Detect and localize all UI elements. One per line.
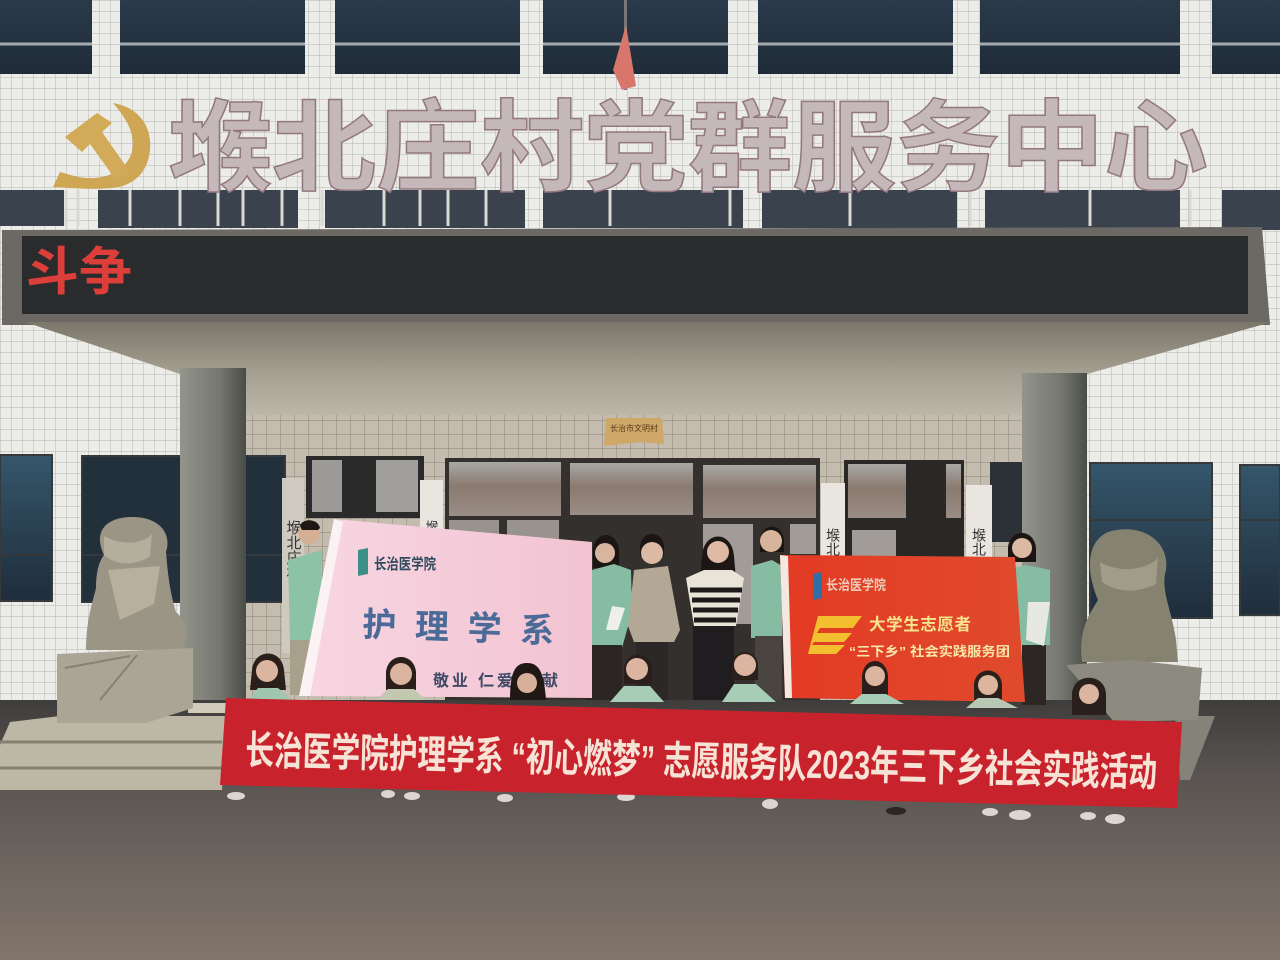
building facade [0, 0, 1280, 420]
seated person 6 [850, 661, 904, 704]
vertical name boards: 堠北 [825, 528, 841, 557]
plaque above door [604, 418, 664, 446]
ground-floor wall [0, 375, 1280, 710]
banner logo: 长治医学院 [826, 577, 886, 593]
seated people row [248, 652, 1106, 715]
icon: hammer and sickle emblem [53, 103, 150, 189]
icon: yellow E mark [808, 616, 862, 654]
vertical name boards: 堠北 [971, 528, 987, 557]
side windows [0, 455, 1280, 618]
vertical name boards: 堠北庄村 [284, 520, 302, 580]
person: teacher in stripes [686, 536, 744, 700]
heading: building sign: 堠北庄村党群服务中心 [168, 93, 1208, 205]
seated person 1 [248, 654, 292, 700]
upper windows [0, 0, 1280, 74]
shoes below main banner [227, 790, 1125, 824]
seated person 8 [1072, 678, 1106, 715]
plaque above door: 长治市文明村 [610, 423, 658, 433]
red-orange banner: “三下乡” 社会实践服务团 [849, 644, 1010, 659]
stone lion left [57, 517, 193, 723]
person: girl right of teacher [751, 526, 784, 700]
person: teacher in grey [628, 534, 680, 700]
vertical name boards: 堠 [424, 520, 438, 533]
stone lion right [1066, 529, 1202, 722]
red-orange banner [780, 555, 1025, 702]
banner logo: 长治医学院 [374, 555, 436, 573]
entrance windows and doors [306, 456, 1022, 700]
pillars [180, 368, 1087, 703]
person: far right girl [1008, 533, 1050, 705]
standing people back row [288, 520, 1050, 705]
LED sign canopy [2, 227, 1270, 325]
seated person 4 [610, 654, 664, 702]
seated person 2 [376, 657, 426, 700]
person: left man [288, 520, 322, 695]
mid windows behind sign [0, 190, 1280, 230]
pink banner: 护理学系 [362, 606, 555, 651]
main red banner [220, 698, 1182, 808]
pink banner: 敬业 仁爱 奉献 [433, 671, 558, 690]
ground [0, 700, 1280, 960]
vertical name boards [282, 478, 1040, 653]
flag on pole [613, 0, 636, 90]
banner logo [813, 572, 886, 600]
step right [1175, 716, 1215, 780]
person: girl in green [586, 535, 632, 700]
seated person 5 [722, 652, 776, 702]
LED text: 斗争 [26, 244, 132, 302]
seated person 3 [510, 663, 546, 700]
pink banner [299, 519, 592, 698]
seated person 7 [966, 670, 1018, 708]
sign supports [66, 190, 1190, 226]
red-orange banner: 大学生志愿者 [869, 614, 971, 634]
banner logo [358, 548, 436, 576]
steps left [0, 703, 228, 790]
canopy underside [25, 322, 1272, 420]
